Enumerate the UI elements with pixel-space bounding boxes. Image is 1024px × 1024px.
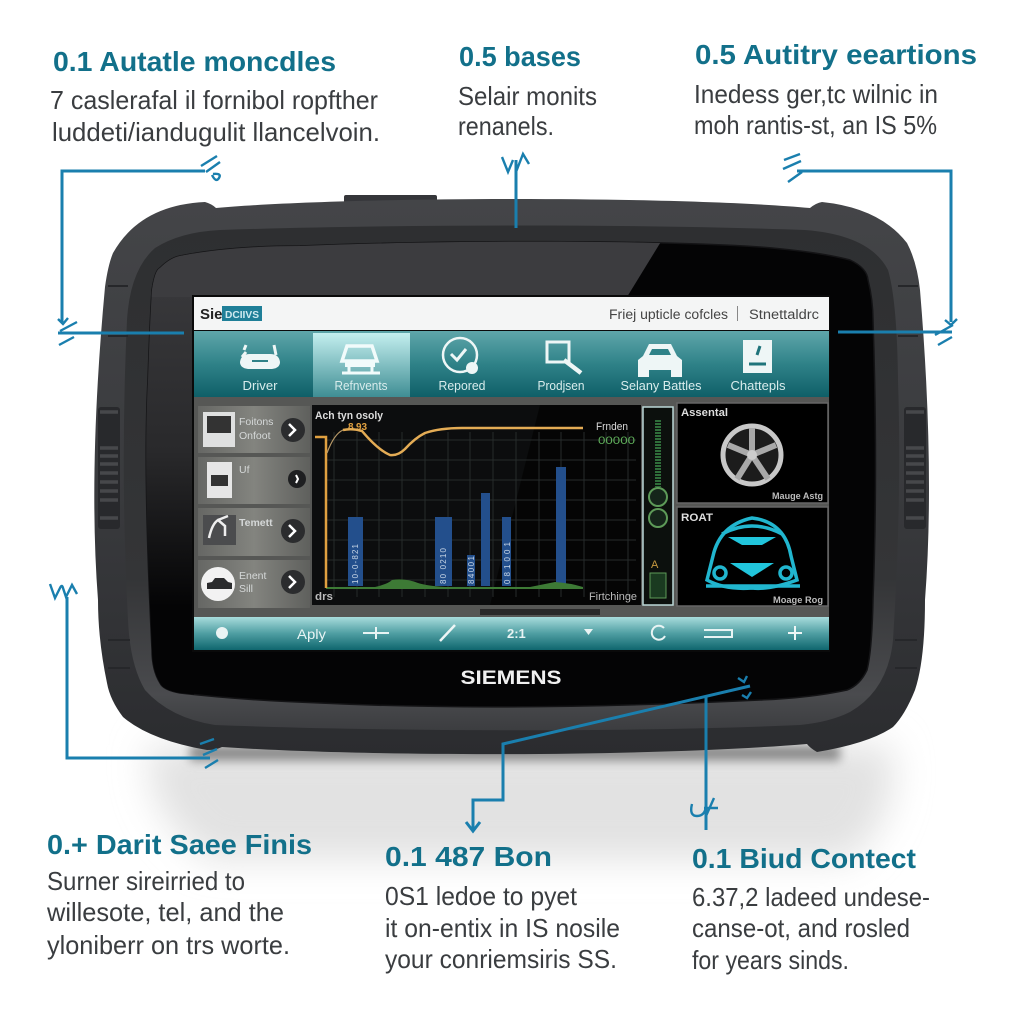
icon: front car: [638, 344, 682, 377]
nav labels: Driver: [242, 379, 278, 393]
nav labels: Prodjsen: [538, 379, 585, 393]
blue bars: 84001: [467, 555, 476, 584]
header bar: Sie: [200, 306, 223, 323]
callout: bottom centre: [385, 841, 620, 974]
brand name: SIEMENS: [460, 668, 562, 689]
chart side labels: [315, 421, 637, 603]
menu row 1: [198, 406, 310, 453]
callout: top centre: Selair monits: [458, 81, 597, 111]
black bezel: [146, 242, 875, 707]
level meter: [643, 407, 673, 605]
callout lines: [50, 154, 957, 831]
leader: top left: [58, 156, 220, 345]
leader: lower left: [50, 584, 218, 768]
callout: top right: [694, 39, 977, 140]
nav labels: Refnvents: [334, 379, 388, 393]
glass glare: [140, 240, 662, 710]
callout: bottom centre: it on-entix in IS nosile: [385, 913, 620, 943]
blue bars: 10-0-821: [351, 543, 360, 584]
header bar: DCIIVS: [225, 309, 259, 321]
callout: top right: Inedess ger,tc wilnic in: [694, 79, 938, 109]
callout: bottom centre: 0S1 ledoe to pyet: [385, 881, 578, 911]
chart side labels: drs: [315, 591, 333, 603]
blue bars: 80 0210: [439, 547, 448, 584]
callout: top right: 0.5 Autitry eeartions: [695, 39, 977, 70]
chart side labels: Frnden: [596, 421, 628, 433]
callout: top centre: renanels.: [458, 111, 554, 141]
menu row 2: [198, 457, 310, 504]
blue bars: [348, 467, 566, 586]
callout: bottom right: for years sinds.: [692, 945, 849, 975]
menu row 3: Temett: [239, 517, 273, 529]
header bar: [194, 297, 829, 330]
bottom toolbar: [194, 617, 829, 650]
wheel panel: Assental: [681, 407, 728, 419]
leader: lower right: [691, 696, 718, 830]
icon: magnifier: [547, 342, 581, 373]
chart title: Ach tyn osoly: [315, 410, 384, 422]
blue bars: 081001: [503, 541, 512, 584]
callout: bottom left: Surner sireirried to: [47, 866, 245, 896]
callout: bottom left: yloniberr on trs worte.: [47, 930, 290, 960]
icon: wheel: [723, 426, 781, 484]
callout: top centre: 0.5 bases: [459, 41, 581, 72]
icon: car: [240, 345, 280, 369]
top power button: [344, 195, 437, 203]
callout: bottom left: 0.+ Darit Saee Finis: [47, 829, 312, 860]
header bar: Friej upticle cofcles: [609, 307, 728, 322]
bottom toolbar: Aply: [297, 626, 326, 642]
chart side labels: Firtchinge: [589, 591, 637, 603]
menu row 2: Uf: [239, 464, 250, 476]
inner lip: [124, 226, 899, 730]
navigation bar: [194, 331, 829, 397]
menu row 4: Enent: [239, 570, 267, 582]
leader: top centre: [502, 154, 529, 228]
menu row 3: [198, 508, 310, 556]
callout: bottom right: [692, 843, 930, 975]
main chart: 8.93: [348, 422, 367, 433]
nav labels: Repored: [438, 379, 486, 393]
wheel panel: Mauge Astg: [772, 491, 823, 502]
icon: lift: [342, 346, 380, 373]
screen UI: [192, 295, 830, 652]
device reflection shadow: [149, 745, 893, 860]
menu row 4: [198, 560, 310, 608]
icon: clock check: [443, 338, 478, 374]
nav labels: Chattepls: [730, 379, 786, 393]
bottom toolbar: 2:1: [507, 626, 526, 641]
level meter: A: [651, 559, 659, 571]
callout: bottom right: canse-ot, and rosled: [692, 913, 910, 943]
car outline panel: [677, 507, 828, 606]
left side grip: [98, 407, 120, 529]
icon: cyan car: [706, 518, 800, 588]
menu row 1: Foitons: [239, 416, 273, 428]
nav labels: Selany Battles: [620, 379, 702, 393]
callout: bottom right: 0.1 Biud Contect: [692, 843, 916, 874]
callout: bottom centre: your conriemsiris SS.: [385, 944, 617, 974]
side menu: [198, 406, 310, 608]
leader: lower centre: [466, 676, 751, 831]
callout: top left: 0.1 Autatle moncdles: [53, 46, 336, 77]
car outline panel: Moage Rog: [773, 595, 823, 606]
leader: top right: [783, 154, 957, 345]
green baseline trace: [326, 579, 583, 589]
rubber shell: [94, 199, 929, 754]
orange curve: [315, 437, 326, 588]
callout: top left: 7 caslerafal il fornibol ropfther: [50, 85, 378, 115]
menu row 1: Onfoot: [239, 430, 271, 442]
right side grip: [904, 407, 926, 529]
icon: document: [743, 340, 772, 373]
callout: bottom left: willesote, tel, and the: [46, 897, 284, 927]
grey UI backdrop: [194, 397, 829, 617]
callout: bottom left: [46, 829, 312, 960]
device: Siemens diagnostic tablet: [94, 195, 929, 754]
main chart: [312, 405, 641, 605]
callout: bottom centre: 0.1 487 Bon: [385, 841, 552, 872]
header bar: Stnettaldrc: [749, 307, 819, 322]
menu row 4: Sill: [239, 583, 253, 595]
car outline panel: ROAT: [681, 512, 713, 524]
callout: top left: [50, 46, 380, 147]
callout: top right: moh rantis-st, an IS 5%: [694, 110, 937, 140]
chart side labels: 00000: [598, 435, 635, 447]
callout: bottom right: 6.37,2 ladeed undese-: [692, 882, 930, 912]
scrollbar: [480, 609, 600, 615]
callout: top centre: [458, 41, 597, 141]
wheel panel: [677, 403, 828, 503]
callout: top left: luddeti/iandugulit llancelvoin.: [52, 117, 380, 147]
nav labels: [242, 379, 786, 393]
